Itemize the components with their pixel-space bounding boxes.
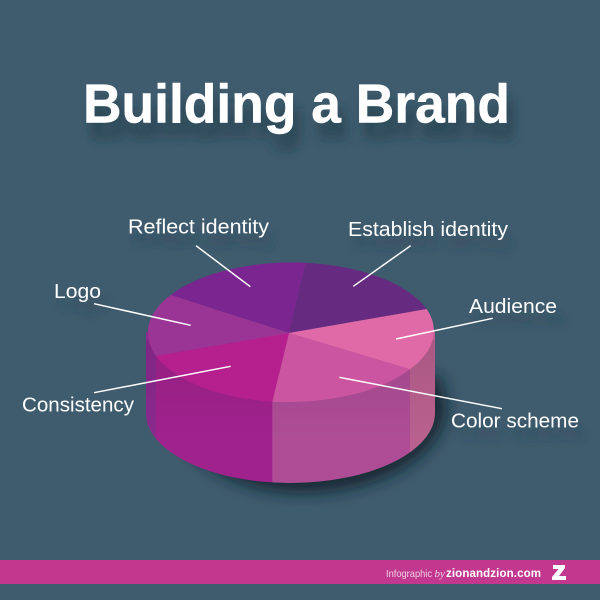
slice: audience (289, 309, 434, 369)
slice: color scheme (272, 333, 410, 402)
slice: logo (148, 295, 289, 356)
slice: consistency (156, 333, 289, 402)
label: consistency: Consistency (22, 394, 135, 416)
leader lines (94, 246, 502, 409)
footer bar (0, 560, 600, 584)
label shadows: Reflect identity (134, 228, 276, 251)
label: establish identity: Establish identity (348, 218, 509, 241)
label: audience: Audience (469, 295, 557, 318)
footer credit: zionandzion.com (446, 568, 541, 580)
labels (22, 216, 579, 432)
label shadows: Audience (476, 307, 564, 330)
footer credit (386, 568, 541, 580)
label: color scheme: Color scheme (451, 410, 579, 432)
pie chart cylinder (140, 262, 447, 493)
footer credit: by (434, 568, 445, 580)
icon: Z logo (552, 565, 566, 580)
title: Building a Brand (83, 72, 510, 134)
footer credit: Infographic (386, 568, 432, 580)
title: Building a Brand (89, 88, 516, 150)
slice: reflect identity (171, 262, 306, 333)
slice: establish identity (289, 263, 427, 333)
label shadows: Establish identity (354, 230, 515, 253)
label shadows: Color scheme (457, 421, 585, 444)
cylinder side walls (146, 332, 435, 483)
label: logo: Logo (54, 280, 101, 303)
label shadows (60, 228, 585, 444)
label: reflect identity: Reflect identity (128, 216, 270, 238)
label shadows: Logo (60, 292, 108, 315)
cylinder drop shadow (180, 375, 447, 493)
